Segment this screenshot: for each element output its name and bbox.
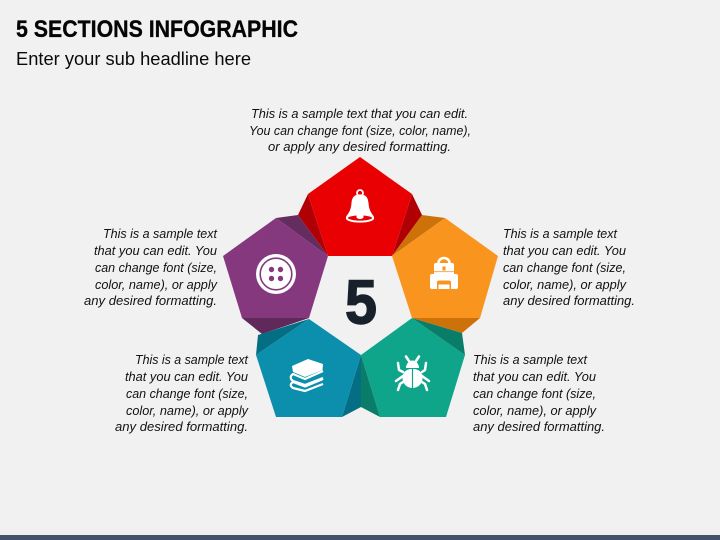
panel: green pentagon folds <box>361 318 465 417</box>
text block: lower right: color, name), or apply <box>473 404 597 418</box>
icon: bell <box>346 190 374 222</box>
icon: button <box>256 254 296 294</box>
text block: top <box>249 107 471 154</box>
icon: books <box>291 359 323 391</box>
panel: purple pentagon <box>223 215 328 334</box>
footer bar <box>0 535 720 540</box>
text block: left: color, name), or apply <box>95 278 218 292</box>
text block: lower right: that you can edit. You <box>473 370 596 384</box>
title: 5 SECTIONS INFOGRAPHIC <box>16 16 298 43</box>
text block: lower right <box>473 353 605 434</box>
text block: lower right: can change font (size, <box>473 387 596 401</box>
text block: right: any desired formatting. <box>503 294 635 308</box>
text block: lower left: can change font (size, <box>126 387 248 401</box>
text block: right: This is a sample text <box>503 227 618 241</box>
text block: right <box>503 227 635 308</box>
text block: lower left: that you can edit. You <box>125 370 248 384</box>
subtitle: Enter your sub headline here <box>16 49 251 69</box>
text block: lower right: This is a sample text <box>473 353 588 367</box>
text block: left: This is a sample text <box>103 227 218 241</box>
text block: lower left <box>115 353 249 434</box>
text block: right: can change font (size, <box>503 261 626 275</box>
center number: 5 <box>345 268 377 338</box>
text block: lower left: This is a sample text <box>135 353 249 367</box>
text block: lower left: any desired formatting. <box>115 420 248 434</box>
text block: right: that you can edit. You <box>503 244 626 258</box>
panel: orange pentagon <box>392 215 498 333</box>
text block: top: or apply any desired formatting. <box>268 140 451 154</box>
text block: right: color, name), or apply <box>503 278 627 292</box>
panel: green pentagon <box>361 318 465 417</box>
text block: lower right: any desired formatting. <box>473 420 605 434</box>
text block: lower left: color, name), or apply <box>126 404 249 418</box>
text block: left <box>84 227 218 308</box>
text block: left: any desired formatting. <box>84 294 217 308</box>
text block: top: You can change font (size, color, name), <box>249 124 471 138</box>
text block: left: can change font (size, <box>95 261 217 275</box>
text block: left: that you can edit. You <box>94 244 217 258</box>
panel: red pentagon <box>298 157 422 256</box>
icon: backpack <box>430 258 458 289</box>
text block: top: This is a sample text that you can edit. <box>251 107 468 121</box>
panel: blue pentagon <box>256 319 361 417</box>
icon: bug <box>396 356 429 390</box>
